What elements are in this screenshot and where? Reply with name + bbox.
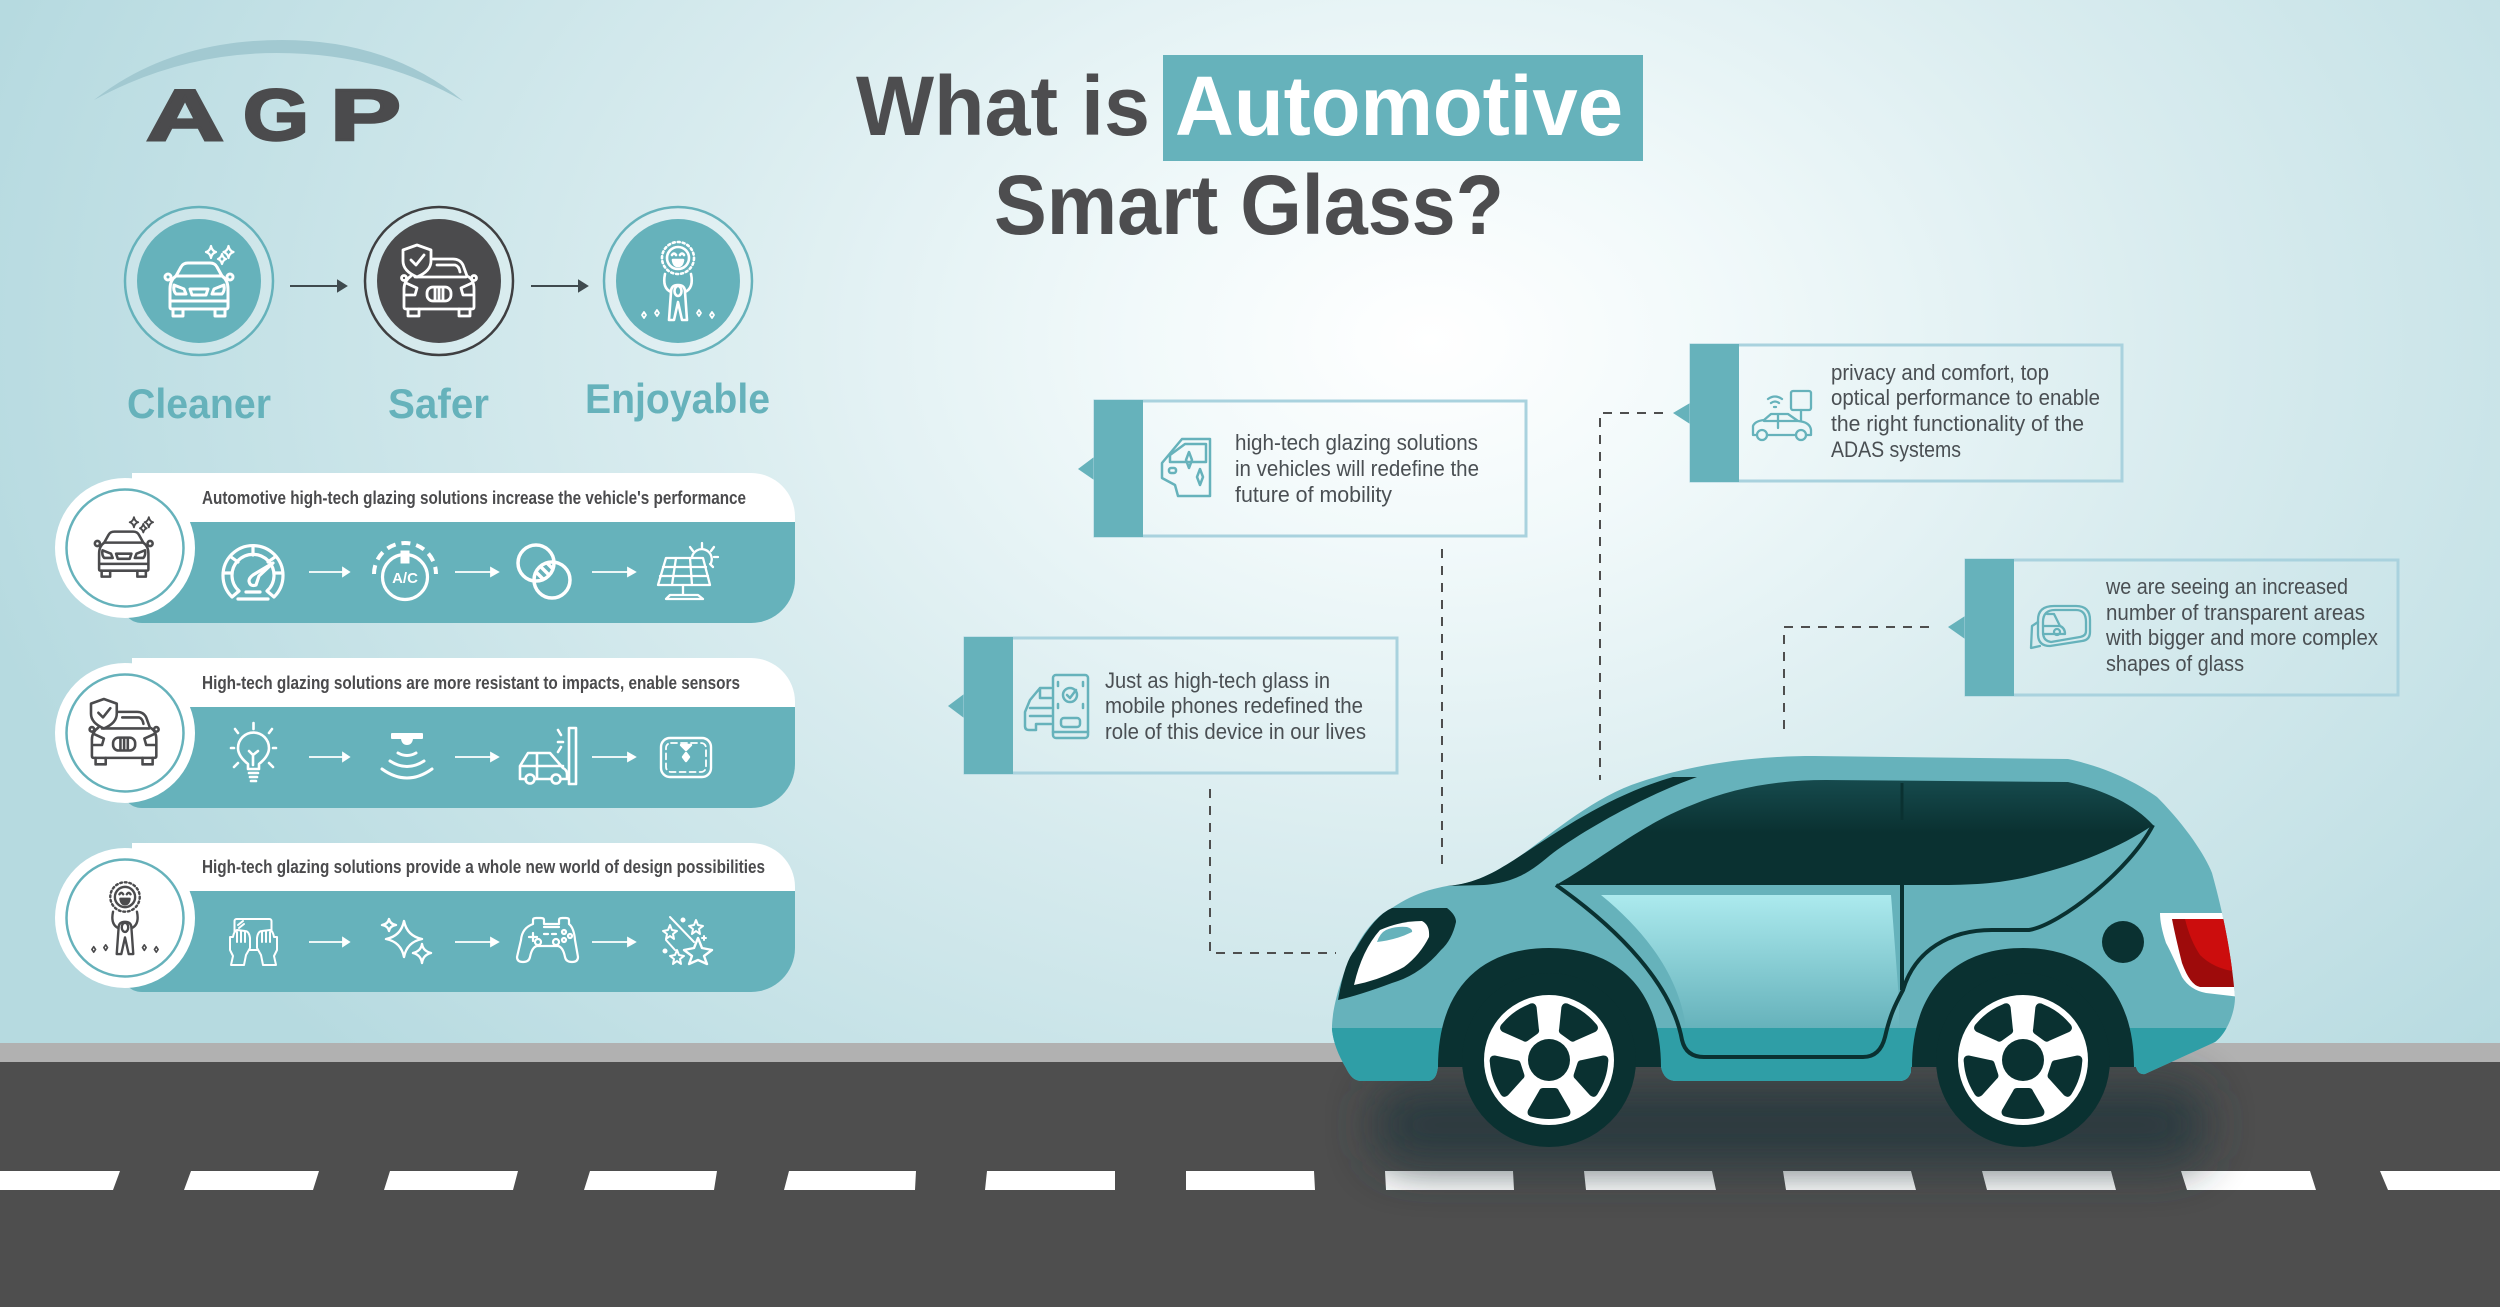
title: Smart Glass? — [994, 158, 1504, 252]
icon: gauge — [223, 546, 283, 599]
arrow — [592, 568, 635, 576]
dashed connector lines — [1210, 413, 1929, 953]
icon: sensor — [382, 733, 432, 778]
wheel arches — [1438, 948, 2134, 1067]
arrow — [592, 938, 635, 946]
callout: transparent areas — [1948, 559, 2398, 696]
callout text: ADAS systems — [1831, 437, 1961, 462]
icon: hands on glass tablet — [230, 919, 277, 965]
icon: car and glass — [520, 728, 576, 784]
windshield strip — [1447, 777, 1697, 886]
panel: safety — [55, 658, 795, 808]
side windows — [1556, 780, 2153, 885]
door glass — [1601, 895, 1899, 1028]
callout text: with bigger and more complex — [2105, 625, 2378, 650]
icon: clean car — [95, 517, 153, 577]
badge: Cleaner — [125, 207, 273, 427]
arrow — [455, 568, 498, 576]
car shadow — [1375, 1085, 2205, 1165]
icon: side mirror — [2031, 606, 2090, 648]
panel 2 heading: High-tech glazing solutions are more resistant to impacts, enable sensors — [202, 673, 740, 693]
arrow: Cleaner to Safer — [290, 281, 346, 291]
panel 3 heading: High-tech glazing solutions provide a whole new world of design possibilities — [202, 857, 765, 877]
arrow — [592, 753, 635, 761]
panel 1 heading: Automotive high-tech glazing solutions increase the vehicle's performance — [202, 488, 746, 508]
icon: A/C: A/C — [392, 570, 418, 587]
icon: safe car — [90, 699, 159, 764]
callout text: mobile phones redefined the — [1105, 693, 1363, 718]
icon: happy person — [92, 882, 158, 954]
callout text: optical performance to enable — [1831, 385, 2100, 410]
icon: car door — [1162, 439, 1210, 496]
callout: mobile phones — [948, 637, 1397, 774]
badge: Enjoyable: Enjoyable — [585, 375, 770, 422]
logo: AGP: P — [330, 76, 401, 156]
title: What is — [856, 59, 1150, 153]
icon: A/C — [374, 543, 436, 600]
badge: Enjoyable — [585, 207, 770, 422]
arrow — [309, 753, 349, 761]
arrow — [455, 938, 498, 946]
rear wheel — [1936, 973, 2110, 1147]
icon: phone and hand — [1025, 675, 1088, 738]
callout text — [1831, 360, 2100, 462]
arrow: Safer to Enjoyable — [531, 281, 587, 291]
callout text — [1235, 430, 1479, 507]
arrow — [455, 753, 498, 761]
callout text: high-tech glazing solutions — [1235, 430, 1478, 455]
logo: AGP: G — [243, 76, 309, 156]
icon: smart windshield — [661, 738, 711, 777]
car — [1320, 740, 2250, 1147]
icon: light bulb — [231, 723, 276, 781]
callout text: we are seeing an increased — [2105, 574, 2348, 599]
callout text: number of transparent areas — [2106, 600, 2365, 625]
tail light — [2160, 913, 2240, 997]
icon: solar panel — [658, 543, 718, 599]
panel: performance — [55, 473, 795, 623]
callout text: role of this device in our lives — [1105, 719, 1366, 744]
title: Automotive — [1175, 59, 1623, 153]
road — [0, 1043, 2500, 1307]
badge: Safer — [365, 207, 513, 427]
logo: AGP: A — [146, 76, 224, 156]
icon: gamepad — [517, 918, 578, 962]
callout text: Just as high-tech glass in — [1105, 668, 1330, 693]
callout text: future of mobility — [1235, 482, 1392, 507]
callout text: privacy and comfort, top — [1831, 360, 2049, 385]
callout text: in vehicles will redefine the — [1235, 456, 1479, 481]
badge: Safer: Safer — [388, 380, 489, 427]
callout: ADAS — [1673, 344, 2122, 482]
icon: overlapping lenses — [518, 545, 570, 598]
callout text — [1105, 668, 1366, 744]
title — [856, 55, 1643, 252]
badge: Cleaner: Cleaner — [127, 380, 271, 427]
arrow — [309, 938, 349, 946]
callout text — [2105, 574, 2378, 676]
logo: AGP — [94, 40, 463, 156]
car body — [1332, 756, 2235, 1081]
front wheel — [1462, 973, 1636, 1147]
icon: connected car — [1753, 391, 1811, 440]
callout text: shapes of glass — [2106, 651, 2244, 676]
icon: shooting stars — [663, 917, 712, 964]
panel: enjoyment — [55, 843, 795, 992]
callout: mobility — [1078, 400, 1526, 537]
callout text: the right functionality of the — [1831, 411, 2084, 436]
icon: sparkles — [382, 919, 431, 963]
arrow — [309, 568, 349, 576]
door outlines — [1556, 825, 2153, 1057]
headlight — [1338, 908, 1456, 1000]
fuel cap — [2102, 921, 2144, 963]
